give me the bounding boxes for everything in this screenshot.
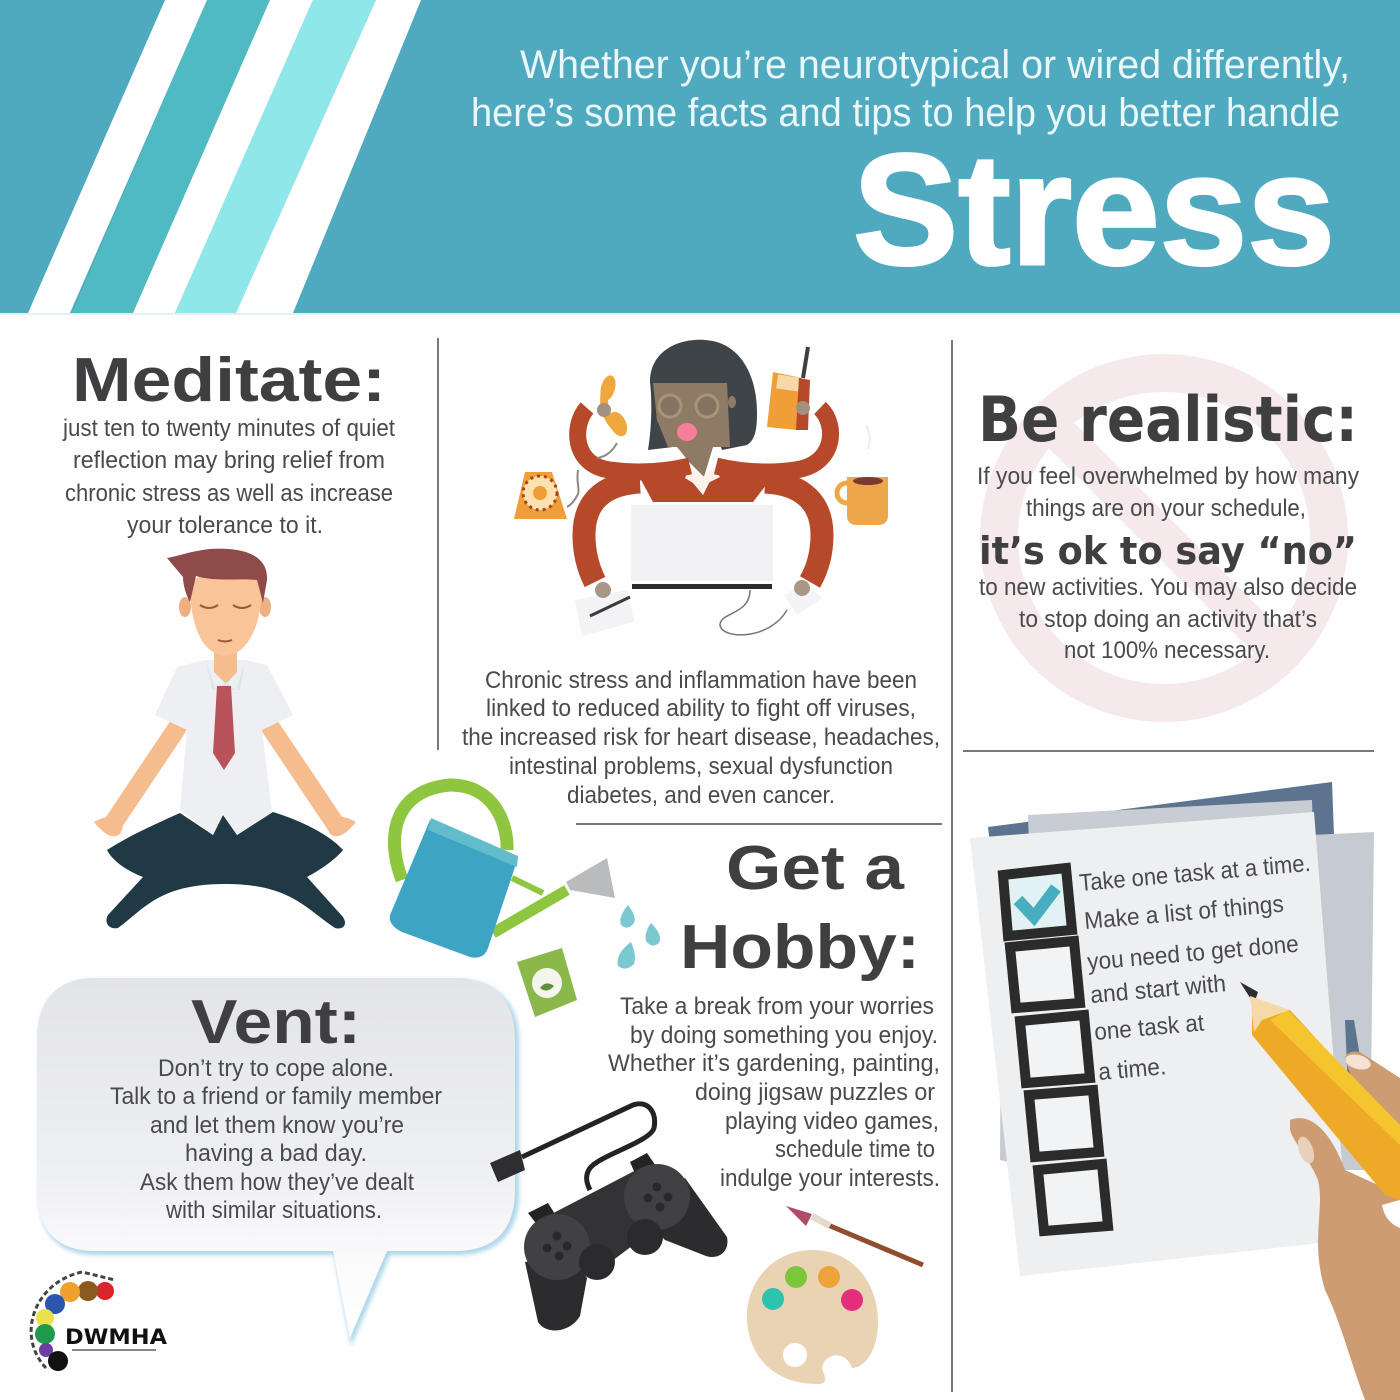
central facts text: diabetes, and even cancer. <box>567 782 835 809</box>
hobby text: indulge your interests. <box>720 1165 940 1192</box>
logo: DWMHA: DWMHA <box>65 1325 168 1349</box>
checklist text: Make a list of things <box>1083 891 1285 935</box>
vent text: Don’t try to cope alone. <box>158 1055 394 1082</box>
header banner <box>0 0 1400 315</box>
vent heading: Vent: <box>191 988 361 1057</box>
hobby text: schedule time to <box>775 1136 935 1163</box>
checkboxes <box>1003 868 1108 1231</box>
hobby text: by doing something you enjoy. <box>630 1022 938 1049</box>
be realistic text: to new activities. You may also decide <box>979 574 1357 601</box>
checklist text: you need to get done <box>1086 931 1300 976</box>
meditate text: chronic stress as well as increase <box>65 480 393 507</box>
get a hobby heading: Get a <box>726 834 905 903</box>
vent speech bubble <box>37 978 519 1346</box>
central facts text: the increased risk for heart disease, headaches, <box>462 724 940 751</box>
icon: meditating man <box>94 549 356 928</box>
checklist text: and start with <box>1089 970 1227 1009</box>
checklist text: a time. <box>1097 1053 1167 1086</box>
header intro text: Whether you’re neurotypical or wired differently, <box>520 43 1350 87</box>
vent text <box>110 1055 442 1224</box>
title: Stress <box>853 122 1335 298</box>
get a hobby heading <box>680 834 920 982</box>
logo: DWMHA <box>31 1272 168 1371</box>
be realistic text <box>977 463 1359 664</box>
meditate text: reflection may bring relief from <box>73 447 385 474</box>
vent text: and let them know you’re <box>150 1112 404 1139</box>
be realistic heading: Be realistic: <box>978 383 1358 456</box>
get a hobby heading: Hobby: <box>680 913 920 982</box>
be realistic text: If you feel overwhelmed by how many <box>977 463 1359 490</box>
icon: check mark <box>1018 888 1056 917</box>
checklist text <box>1078 850 1312 1086</box>
panel: meditate heading: Meditate: <box>72 346 386 415</box>
vent text: having a bad day. <box>185 1140 367 1167</box>
vent text: Ask them how they’ve dealt <box>140 1169 414 1196</box>
be realistic text: not 100% necessary. <box>1064 637 1270 664</box>
icon: watering can <box>390 785 615 958</box>
no symbol background <box>999 373 1329 703</box>
central facts text <box>462 667 940 809</box>
icon: water drops <box>618 905 660 969</box>
dividers <box>438 338 1374 1392</box>
vent text: with similar situations. <box>165 1197 382 1224</box>
vent text: Talk to a friend or family member <box>110 1083 442 1110</box>
central facts text: linked to reduced ability to fight off viruses, <box>486 695 916 722</box>
hobby text: doing jigsaw puzzles or <box>695 1079 935 1106</box>
checklist text: Take one task at a time. <box>1078 850 1312 897</box>
icon: seed packet <box>517 948 577 1017</box>
meditate text <box>62 415 395 539</box>
meditate text: your tolerance to it. <box>127 512 323 539</box>
icon: paint palette and brush <box>747 1206 923 1384</box>
icon: game controller <box>490 1104 727 1330</box>
icon: checklist pages <box>970 782 1374 1276</box>
be realistic text: things are on your schedule, <box>1026 495 1306 522</box>
hobby text: Take a break from your worries <box>620 993 934 1020</box>
hobby text: Whether it’s gardening, painting, <box>608 1050 940 1077</box>
hobby text: playing video games, <box>725 1108 939 1135</box>
icon: stressed woman with many arms <box>514 340 888 636</box>
header intro text: here’s some facts and tips to help you better handle <box>471 91 1340 135</box>
checklist text: one task at <box>1093 1009 1205 1046</box>
be realistic text: it’s ok to say “no” <box>979 529 1357 573</box>
header intro text <box>471 43 1350 135</box>
meditate text: just ten to twenty minutes of quiet <box>62 415 395 442</box>
hobby text <box>608 993 940 1192</box>
be realistic text: to stop doing an activity that’s <box>1019 606 1317 633</box>
central facts text: intestinal problems, sexual dysfunction <box>509 753 893 780</box>
icon: hand holding pencil <box>1240 982 1400 1400</box>
central facts text: Chronic stress and inflammation have been <box>485 667 917 694</box>
